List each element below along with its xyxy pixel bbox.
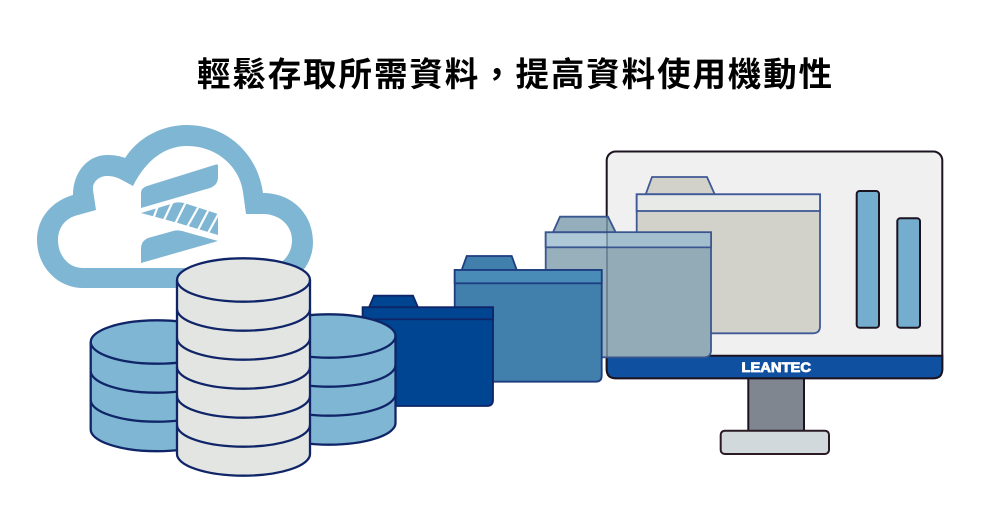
title: 輕鬆存取所需資料，提高資料使用機動性 [197, 57, 834, 94]
logo [141, 164, 220, 263]
folder: dark blue [363, 296, 493, 406]
monitor base [721, 431, 829, 454]
monitor [607, 152, 942, 454]
database: centre grey cylinder [177, 258, 310, 476]
monitor stand [748, 376, 804, 431]
database: right blue cylinder [262, 314, 396, 445]
monitor bottom band [607, 356, 942, 378]
folder: mid blue [455, 256, 602, 382]
monitor brand label: LEANTEC [742, 360, 811, 375]
monitor screen [607, 152, 942, 378]
icon: cloud with logo [37, 125, 313, 288]
level bar short [897, 218, 920, 328]
folder: translucent grey-blue [546, 217, 711, 357]
cloud outline [37, 125, 313, 288]
database: left blue cylinder [91, 320, 224, 451]
level bar tall [857, 191, 879, 328]
folder on screen [637, 177, 820, 333]
